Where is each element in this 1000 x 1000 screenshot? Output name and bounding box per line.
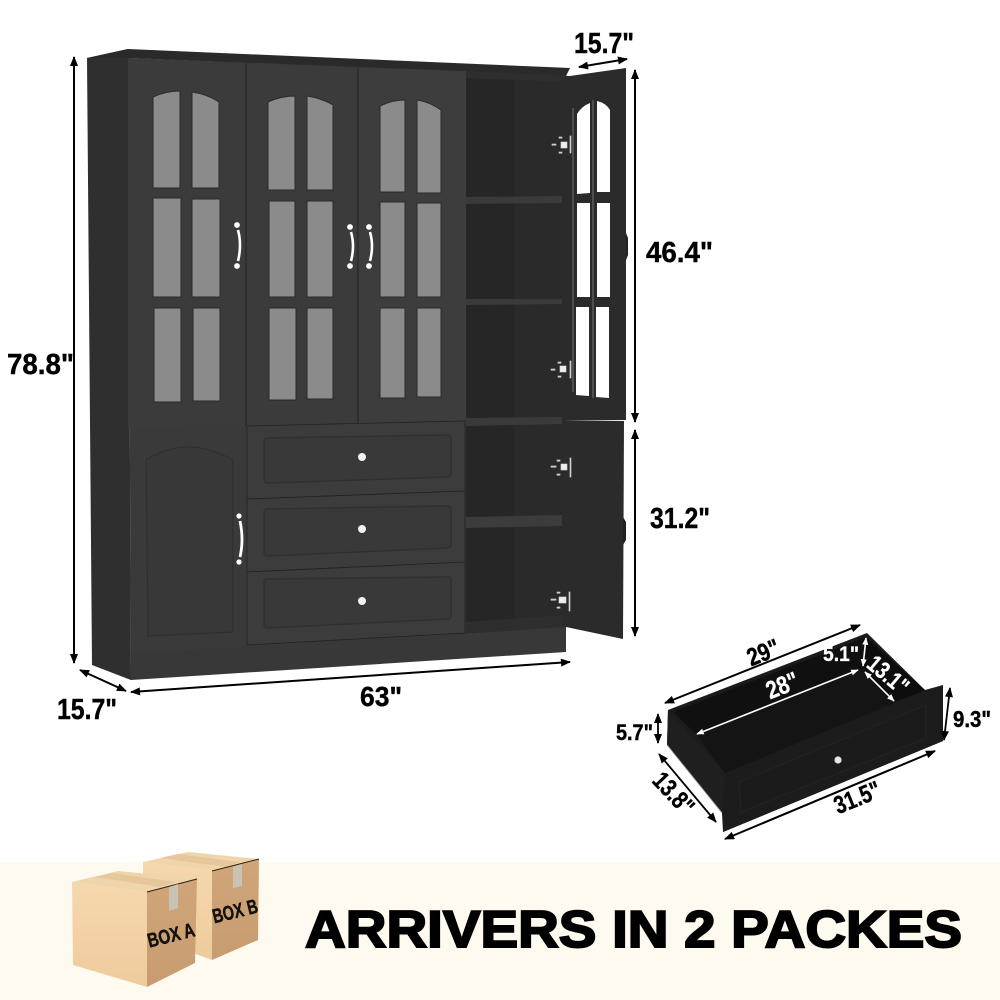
drawer dimension 13.1: 13.1" — [861, 650, 914, 701]
banner heading: ARRIVERS IN 2 PACKES — [305, 901, 962, 959]
hinges — [551, 136, 571, 611]
drawer dimension 9.3 — [944, 688, 991, 740]
open drawer diagram — [616, 625, 991, 839]
height 78.8: 78.8" — [7, 349, 74, 381]
interior of open section — [465, 71, 570, 634]
upper glass door right — [358, 68, 466, 423]
drawer dimension 31.5: 31.5" — [830, 776, 885, 820]
upper glass door middle — [246, 63, 358, 426]
cabinet — [87, 49, 628, 680]
bottom depth 15.7 — [57, 670, 126, 726]
open glass door — [562, 68, 628, 420]
drawer dimension 28: 28" — [762, 667, 803, 705]
drawer dimension 29: 29" — [743, 634, 784, 672]
banner background — [0, 862, 1000, 1000]
drawer dimension 9.3: 9.3" — [953, 706, 991, 732]
drawer dimension 5.7: 5.7" — [616, 720, 653, 745]
dimension arrows and labels for cabinet — [7, 28, 713, 726]
cabinet side panel — [87, 49, 131, 680]
bottom banner — [0, 852, 1000, 1000]
box A: BOX A — [145, 919, 197, 952]
cabinet top — [87, 49, 570, 76]
upper door height 46.4: 46.4" — [646, 237, 713, 269]
top depth 15.7: 15.7" — [574, 28, 634, 60]
bottom depth 15.7: 15.7" — [57, 694, 117, 726]
upper glass door left — [128, 58, 246, 428]
box B: BOX B — [210, 896, 260, 928]
front frame and base — [128, 58, 566, 680]
open solid door — [562, 420, 626, 639]
drawer dimension 31.5 — [725, 751, 935, 839]
lower cabinet door — [130, 426, 246, 653]
drawer dimension 29 — [665, 625, 860, 703]
drawer dimension 5.1: 5.1" — [823, 643, 859, 666]
lower door height 31.2: 31.2" — [650, 503, 710, 535]
drawer dimension 28 — [697, 667, 858, 734]
box B — [143, 852, 260, 960]
width 63: 63" — [360, 681, 402, 712]
box A — [72, 871, 197, 987]
drawers — [247, 421, 465, 645]
width 63 — [131, 662, 570, 712]
drawer body — [667, 633, 943, 832]
door handles upper — [235, 223, 372, 268]
drawer dimension 13.8: 13.8" — [647, 767, 700, 821]
drawer dimension 13.8 — [647, 754, 716, 822]
